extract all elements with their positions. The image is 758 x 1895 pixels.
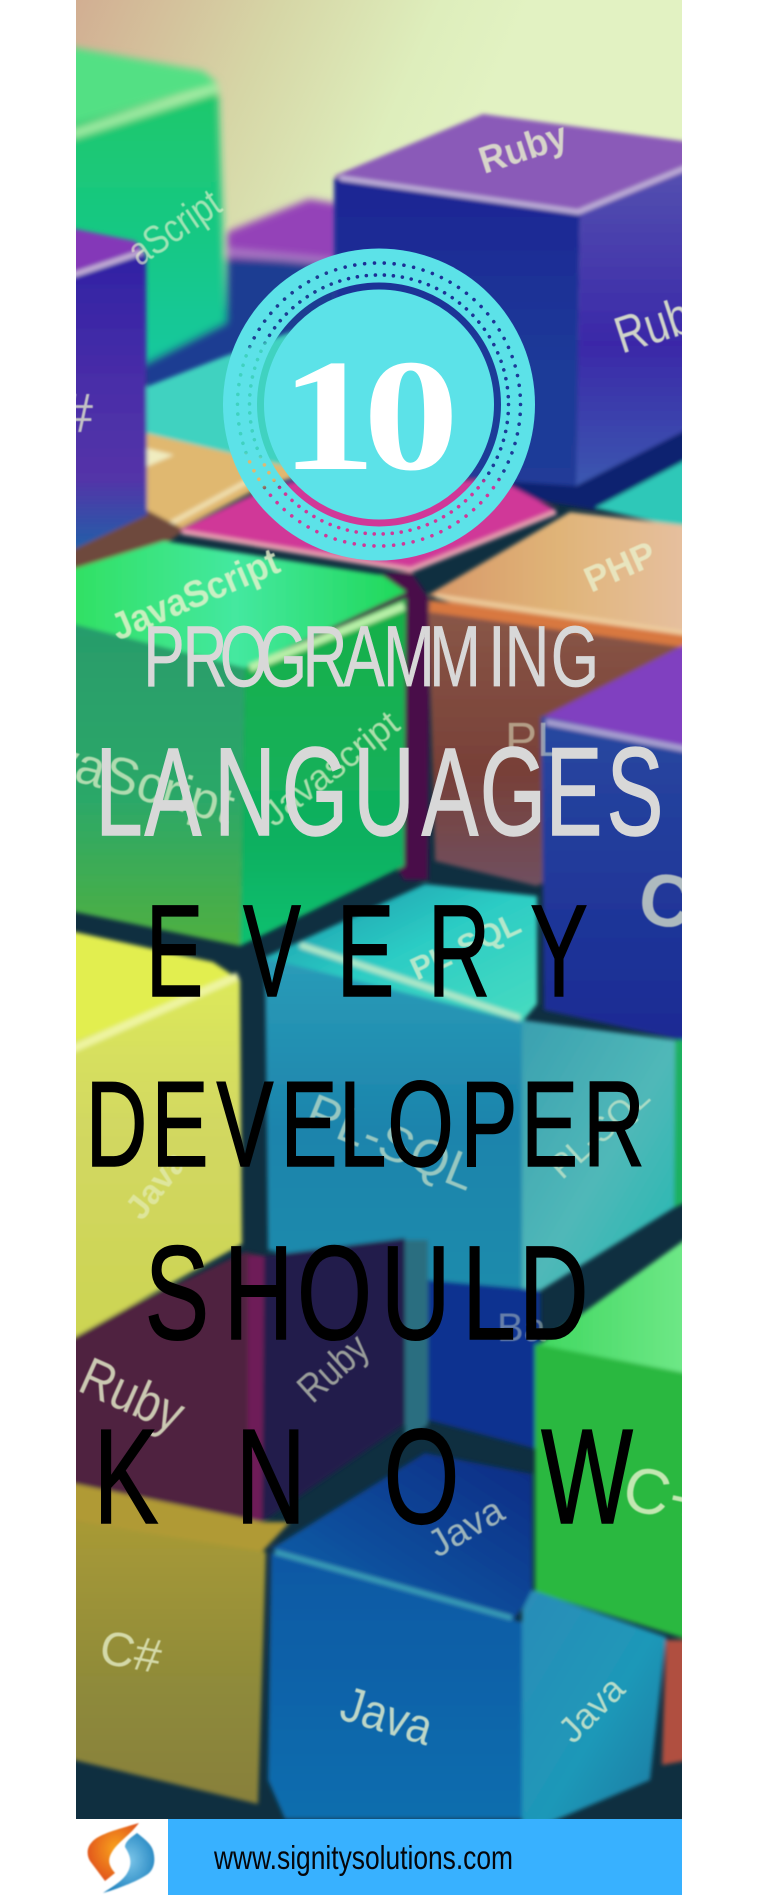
navy fill behind the back cubes (140, 258, 340, 500)
cube label: PL-SQL right: PL-SQL (542, 1077, 657, 1186)
teal PL-SQL cube (263, 884, 690, 1302)
cube label: PL-SQL front: PL-SQL (298, 1083, 484, 1202)
teal gap (405, 1240, 428, 1440)
cube label: PL-SQL top: PL-SQL (405, 905, 526, 987)
yellow Java cube (66, 930, 242, 1342)
title: DEVELOPER: DEVELOPER (86, 1057, 645, 1193)
cube label: Ruby side: Ruby (607, 279, 718, 365)
strip of green behind teal cube (674, 1040, 690, 1208)
teal cube, right (595, 458, 690, 530)
pale tabletop backdrop (76, 0, 682, 400)
title: EVERY: EVERY (146, 878, 588, 1024)
title: PROGRAMMING: PROGRAMMING (143, 608, 599, 704)
cube label: Ruby top: Ruby (473, 113, 573, 182)
blue cube, far rear (428, 1280, 540, 1450)
cube label: PL: PL (505, 714, 564, 767)
cube label: C# left: C# (21, 381, 93, 444)
Ruby cube shadow (500, 425, 690, 510)
red sliver (662, 1640, 690, 1765)
number 10: 10 (280, 328, 459, 504)
orange PHP cube (428, 512, 690, 886)
title: SHOULD: SHOULD (145, 1217, 589, 1368)
cube label: Java yellow: Java (118, 1143, 195, 1227)
cube label: Java front: Java (334, 1675, 440, 1756)
cube label: Ruby maroon: Ruby (71, 1346, 194, 1444)
magenta cube (146, 480, 556, 880)
badge: turquoise dotted ring with number 10 (223, 248, 535, 560)
cube label: C# mustard: C# (96, 1621, 166, 1684)
teal cube, back left (146, 325, 310, 480)
green C++ cube (535, 1236, 690, 1640)
cube label: Javascript right: Javascript (254, 702, 407, 834)
blue url strip (168, 1819, 682, 1895)
cube label: aScript back: aScript (119, 180, 229, 274)
cube label: C# right: C# (634, 856, 739, 951)
cube label: Java right: Java (550, 1667, 633, 1751)
green JavaScript cube, back left (66, 46, 226, 390)
mustard C# cube (66, 1482, 290, 1804)
green JavaScript cube, centre left (66, 541, 406, 946)
title: KNOW: KNOW (94, 1401, 633, 1552)
footer bar (76, 1819, 682, 1895)
cube label: C++: C++ (617, 1451, 750, 1547)
Ruby cube (334, 114, 690, 486)
title: LANGUAGES: LANGUAGES (95, 722, 663, 862)
Ruby maroon cube (66, 1238, 405, 1522)
small purple cube, back (227, 199, 340, 262)
website url: www.signitysolutions.com (213, 1839, 513, 1876)
brown edge below purple cube (66, 510, 185, 578)
cube label: JavaScript top: JavaScript (104, 540, 286, 649)
orange cube, back left (135, 433, 310, 537)
blue Java cube (268, 1453, 666, 1830)
icon: Signity logo (88, 1823, 154, 1893)
purple and blue C# cube, right (541, 642, 690, 1042)
cube label: Java top: Java (421, 1489, 512, 1566)
logo panel (76, 1819, 168, 1895)
cube label: PHP: PHP (578, 533, 662, 600)
purple C# cube, left (66, 227, 147, 553)
cube label: Ba: Ba (497, 1306, 547, 1350)
perforated turquoise ring and disc (223, 248, 535, 560)
cube label: Ruby dark: Ruby (288, 1324, 378, 1411)
